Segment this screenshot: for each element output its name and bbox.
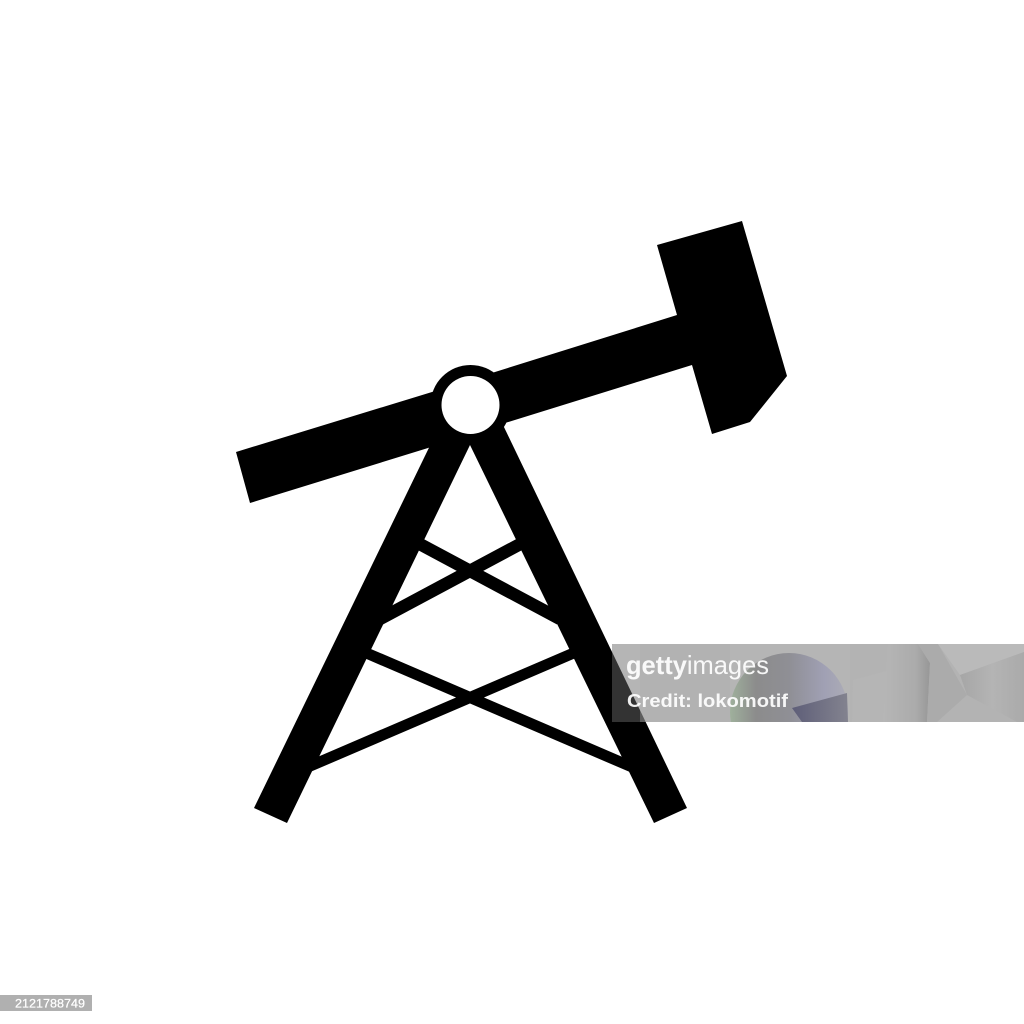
right tower leg xyxy=(470,425,687,823)
upper cross braces xyxy=(380,542,560,619)
icon: oil pump jack xyxy=(236,221,787,823)
lower cross braces xyxy=(308,652,632,767)
image id tag: 2121788749 xyxy=(15,996,85,1010)
beam with counterweight head xyxy=(236,221,787,503)
watermark credit text: Credit: lokomotif xyxy=(627,691,789,711)
image id tag xyxy=(0,995,92,1011)
pivot ring xyxy=(430,365,510,445)
infographic canvas xyxy=(0,221,1024,1011)
left tower leg xyxy=(254,425,470,823)
watermark logo text: gettyimages xyxy=(626,650,769,680)
watermark band xyxy=(612,644,1024,722)
watermark background shapes xyxy=(640,644,1024,722)
